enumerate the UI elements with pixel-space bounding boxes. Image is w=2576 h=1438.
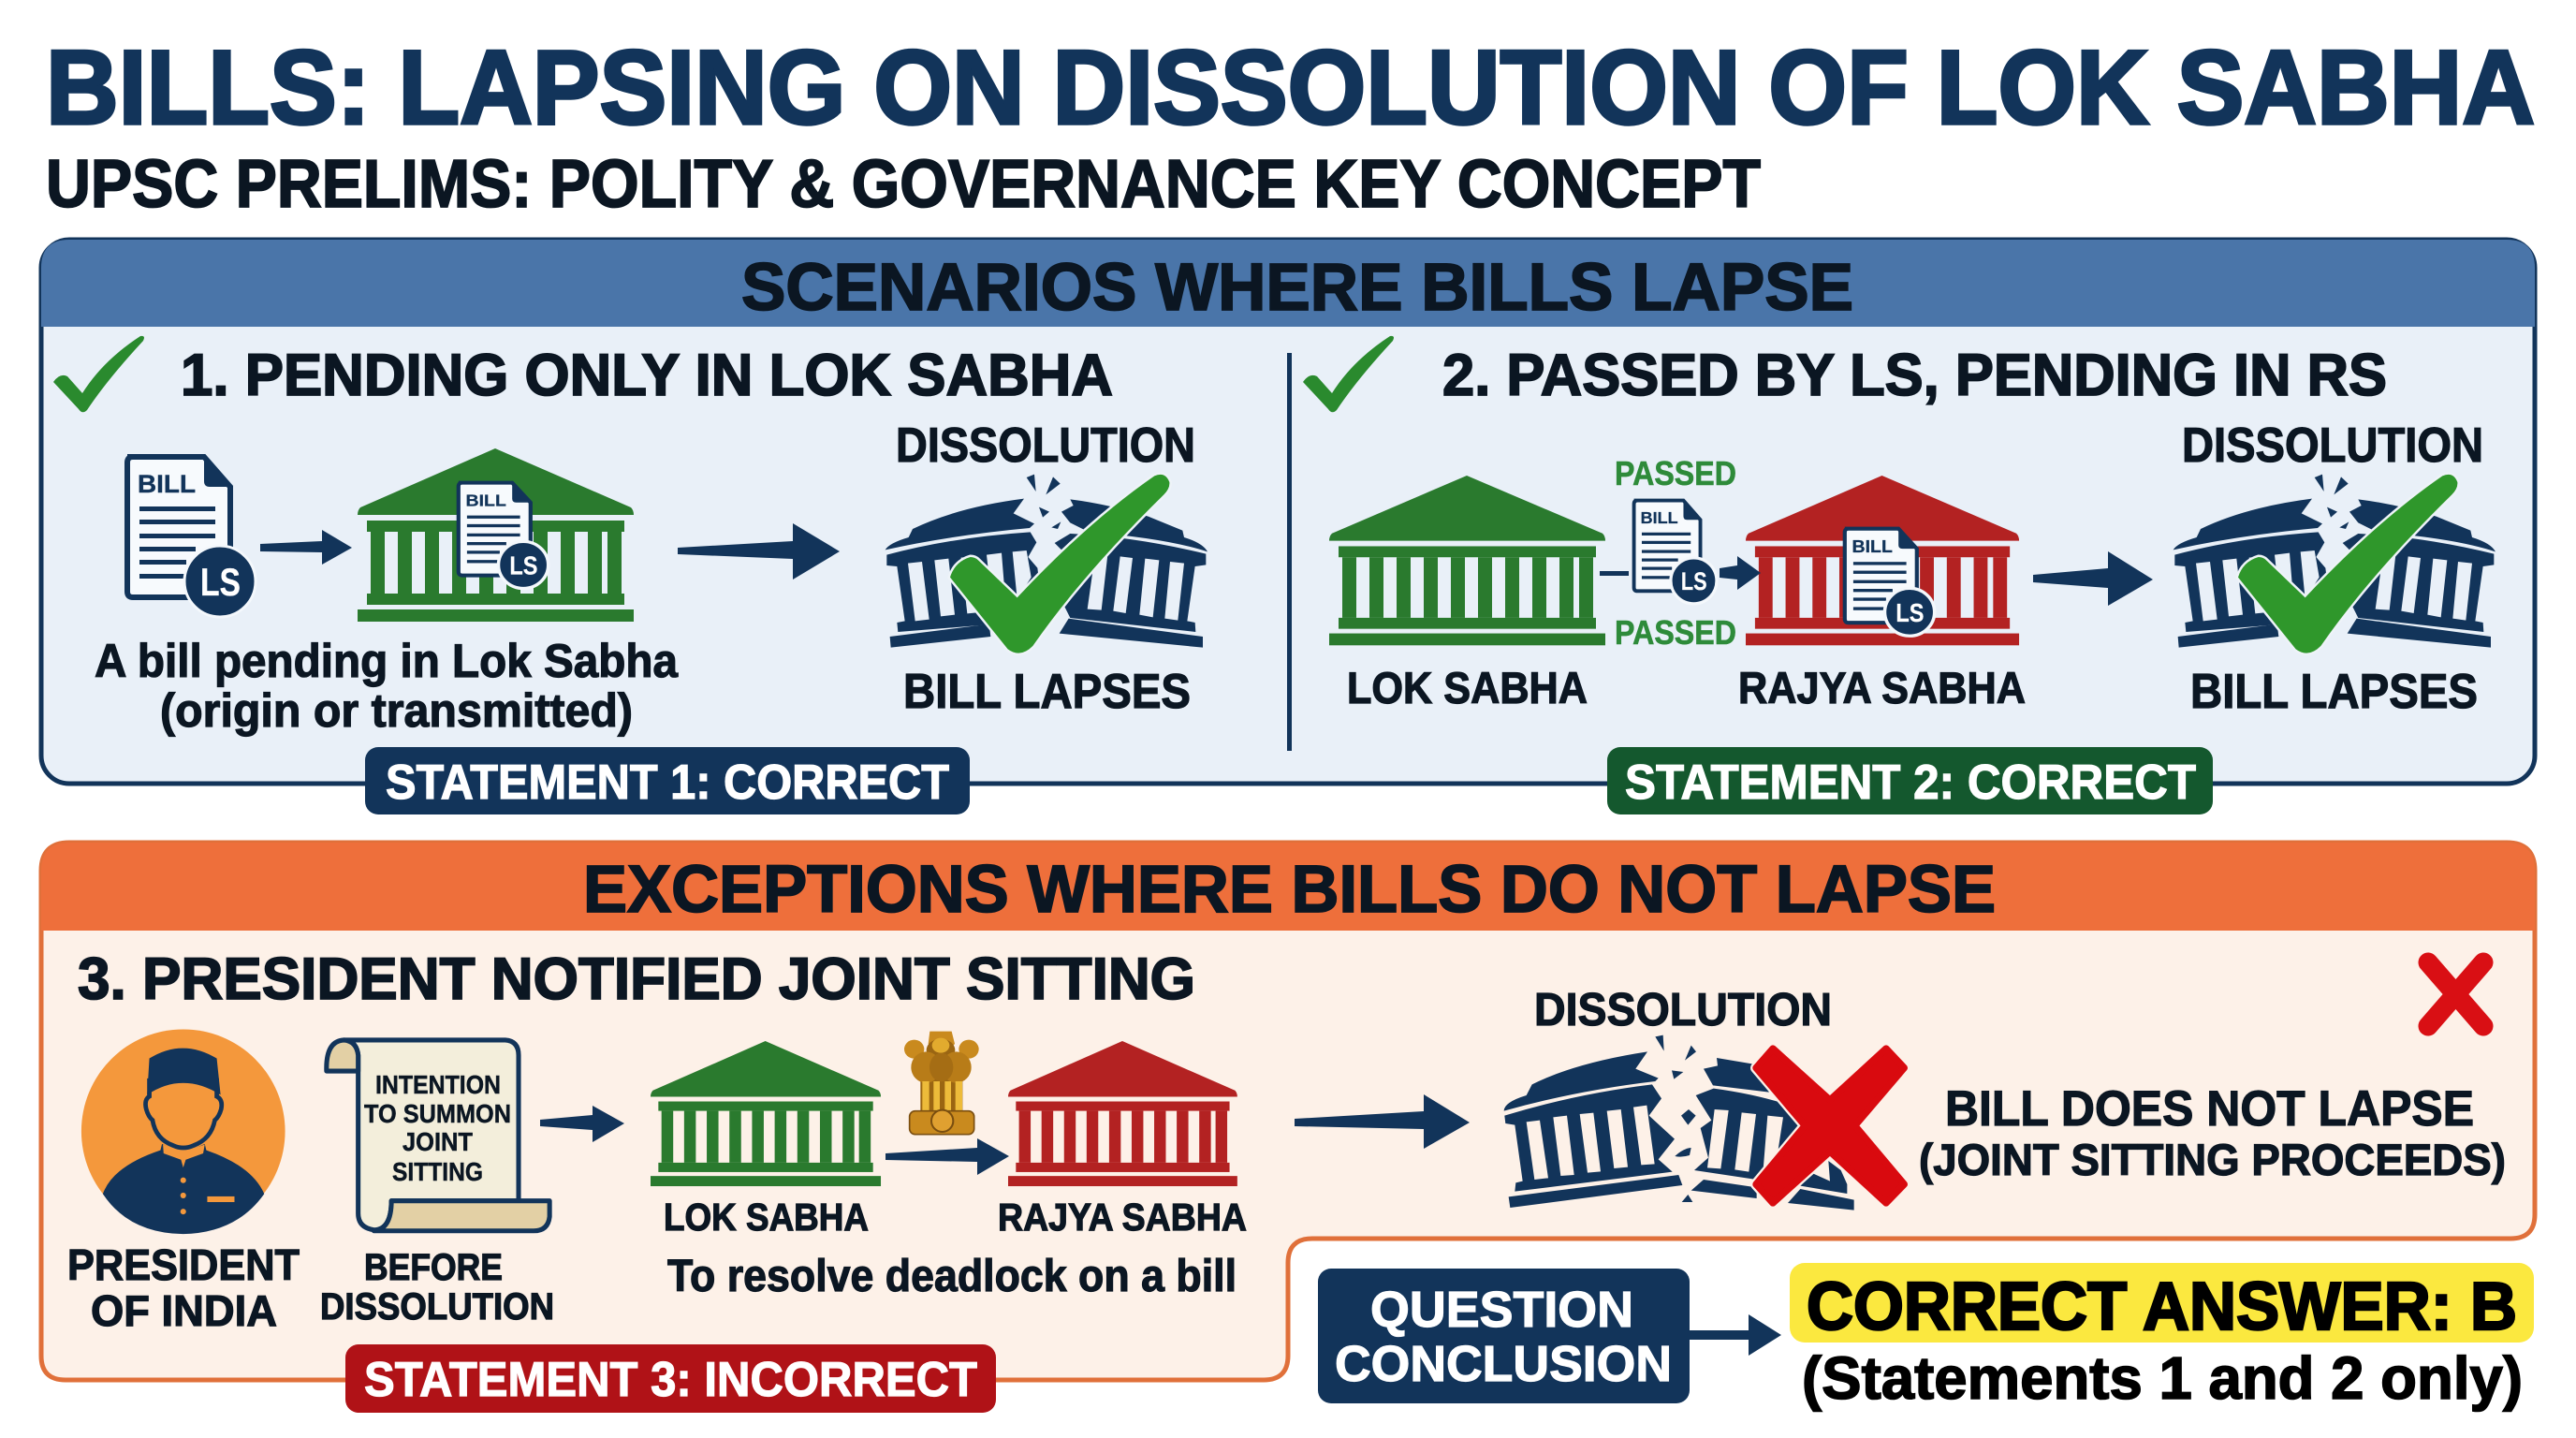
icon: president of India — [81, 1029, 285, 1234]
panel heading: SCENARIOS WHERE BILLS LAPSE — [741, 251, 1853, 325]
label: Rajya Sabha: RAJYA SABHA — [998, 1196, 1247, 1239]
subtitle: UPSC PRELIMS: POLITY & GOVERNANCE KEY CONCEPT — [46, 147, 1761, 222]
conclusion box: CONCLUSION — [1335, 1336, 1672, 1392]
icon: check mark scenario 1 — [53, 336, 144, 412]
conclusion box: QUESTION — [1370, 1282, 1633, 1338]
label: bill does not lapse — [1919, 1081, 2506, 1184]
label: passed top: PASSED — [1615, 454, 1736, 492]
label: president of India: PRESIDENT — [67, 1240, 300, 1289]
title: BILLS: LAPSING ON DISSOLUTION OF LOK SABHA — [46, 29, 2535, 146]
badge: statement 1 correct: STATEMENT 1: CORRECT — [386, 756, 949, 810]
label: passed bottom: PASSED — [1615, 613, 1736, 652]
panel: question conclusion — [1318, 1263, 2534, 1412]
panel header band — [41, 240, 2535, 327]
answer explanation: (Statements 1 and 2 only) — [1802, 1344, 2523, 1412]
icon: scroll with notice: TO SUMMON — [364, 1099, 511, 1128]
arrow: to dissolution — [2033, 551, 2153, 606]
scenario 2 heading: 2. PASSED BY LS, PENDING IN RS — [1442, 343, 2387, 408]
icon: Rajya Sabha building with bill — [1746, 476, 2019, 645]
connector: bill passing between houses — [1600, 501, 1761, 604]
label: Lok Sabha: LOK SABHA — [664, 1196, 869, 1239]
icon: scroll with notice — [327, 1040, 549, 1231]
icon: scroll with notice: JOINT — [402, 1127, 473, 1156]
label: before dissolution: DISSOLUTION — [320, 1286, 554, 1328]
icon: Lok Sabha building with bill: LS — [509, 551, 538, 580]
icon: bill with LS badge — [127, 457, 256, 617]
label: bill does not lapse: (JOINT SITTING PROCEEDS) — [1919, 1135, 2506, 1184]
icon: Lok Sabha building with bill — [358, 448, 634, 622]
icon: red cross — [2428, 962, 2483, 1026]
caption: scenario 1: (origin or transmitted) — [160, 684, 633, 737]
connector: bill passing between houses: BILL — [1641, 508, 1678, 527]
panel header band — [41, 843, 2535, 931]
icon: check mark scenario 2 — [1303, 336, 1394, 412]
icon: bill with LS badge: LS — [200, 560, 241, 604]
label: before dissolution — [320, 1247, 554, 1328]
scenario 1 heading: 1. PENDING ONLY IN LOK SABHA — [181, 343, 1113, 408]
connector: bill passing between houses: LS — [1681, 566, 1707, 595]
panel: exceptions where bills do not lapse — [41, 843, 2535, 1413]
icon: Lok Sabha building — [1329, 476, 1605, 645]
arrow: to dissolution — [678, 523, 840, 580]
label: bill lapses: BILL LAPSES — [903, 665, 1191, 719]
icon: broken parliament with check — [886, 475, 1208, 653]
arrow: bill to Lok Sabha — [260, 530, 352, 565]
scenario 3 heading: 3. PRESIDENT NOTIFIED JOINT SITTING — [78, 946, 1195, 1012]
arrow: to dissolution — [1295, 1094, 1470, 1149]
label: dissolution: DISSOLUTION — [1534, 985, 1832, 1035]
conclusion box — [1318, 1269, 1690, 1403]
panel: scenarios where bills lapse — [41, 240, 2535, 814]
icon: Lok Sabha building with bill: BILL — [465, 491, 506, 510]
caption: resolve deadlock: To resolve deadlock on a bill — [667, 1252, 1237, 1301]
icon: Lok Sabha building — [651, 1041, 881, 1186]
label: before dissolution: BEFORE — [364, 1247, 503, 1288]
caption: scenario 1: A bill pending in Lok Sabha — [95, 635, 679, 687]
icon: bill with LS badge: BILL — [138, 470, 196, 498]
badge: statement 2 correct: STATEMENT 2: CORRECT — [1625, 756, 2196, 810]
answer highlight: CORRECT ANSWER: B — [1807, 1269, 2517, 1344]
label: president of India: OF INDIA — [91, 1286, 277, 1335]
label: dissolution: DISSOLUTION — [2182, 418, 2483, 473]
panel background — [41, 240, 2535, 784]
icon: scroll with notice: INTENTION — [375, 1070, 501, 1099]
icon: Rajya Sabha building with bill: LS — [1895, 598, 1924, 628]
label: bill lapses: BILL LAPSES — [2190, 665, 2478, 719]
arrow: Lok Sabha to Rajya Sabha — [886, 1138, 1009, 1175]
icon: scroll with notice: SITTING — [392, 1157, 483, 1186]
caption: scenario 1 — [95, 635, 679, 737]
arrow: conclusion to answer — [1690, 1314, 1781, 1356]
icon: national emblem — [904, 1032, 979, 1135]
panel background — [41, 843, 2535, 1380]
label: dissolution: DISSOLUTION — [896, 418, 1195, 473]
badge: statement 3 incorrect: STATEMENT 3: INCORRECT — [364, 1353, 977, 1407]
icon: Rajya Sabha building — [1008, 1041, 1237, 1186]
label: bill does not lapse: BILL DOES NOT LAPSE — [1945, 1081, 2474, 1137]
label: president of India — [67, 1240, 300, 1335]
label: Lok Sabha: LOK SABHA — [1347, 663, 1588, 712]
icon: broken parliament with check — [2174, 475, 2496, 653]
icon: broken parliament with red cross — [1504, 1035, 1904, 1211]
icon: Rajya Sabha building with bill: BILL — [1852, 537, 1893, 556]
arrow: scroll to houses — [540, 1106, 624, 1142]
panel heading: EXCEPTIONS WHERE BILLS DO NOT LAPSE — [583, 853, 1996, 927]
label: Rajya Sabha: RAJYA SABHA — [1738, 663, 2026, 712]
